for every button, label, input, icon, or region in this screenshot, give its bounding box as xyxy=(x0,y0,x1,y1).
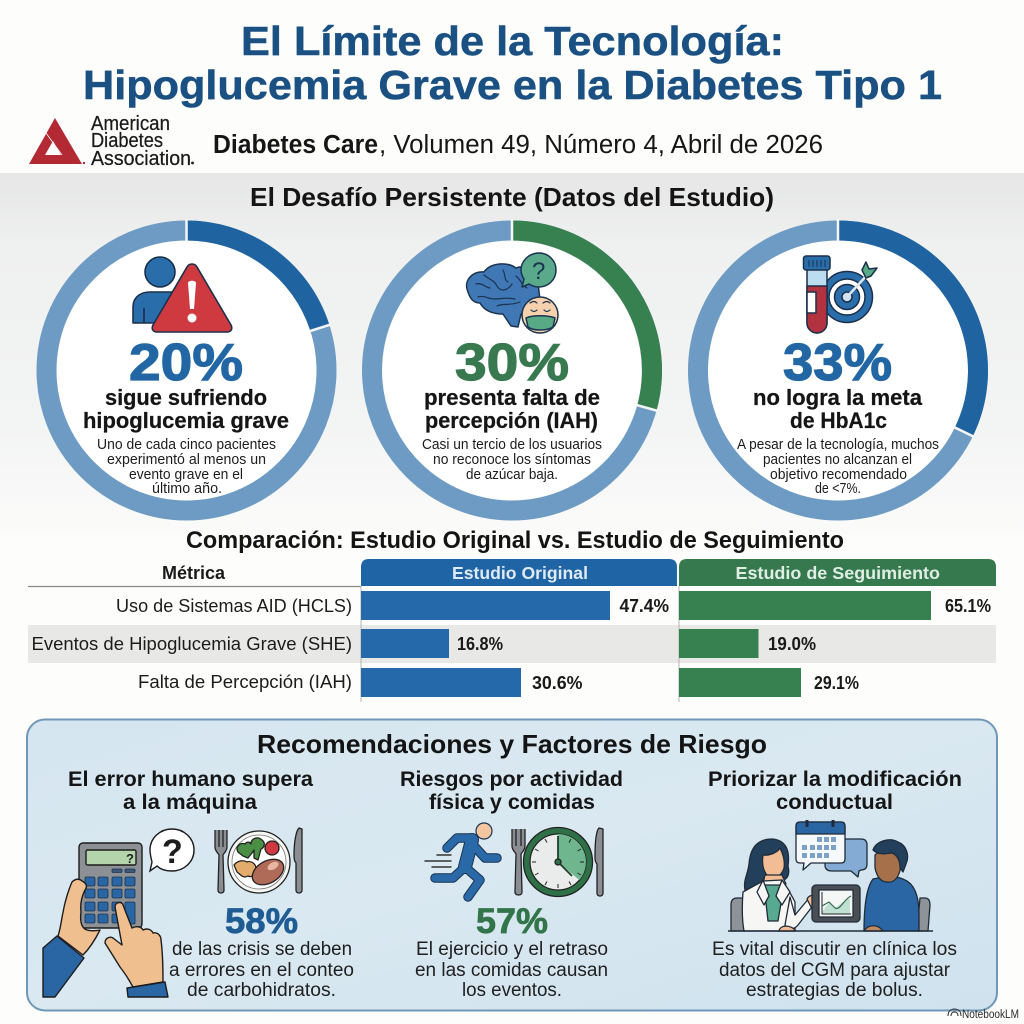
title: Hipoglucemia Grave en la Diabetes Tipo 1 xyxy=(83,62,942,108)
description: evento grave en el xyxy=(129,466,243,483)
description: de <7%. xyxy=(815,480,861,497)
description: de azúcar baja. xyxy=(466,466,558,483)
column: activity and meals xyxy=(400,767,623,1001)
row: Eventos de Hipoglucemia Grave xyxy=(32,629,816,658)
column heading xyxy=(68,767,314,814)
subtitle: presenta falta de xyxy=(424,385,600,410)
description xyxy=(169,939,354,1001)
logo: American Diabetes Association xyxy=(29,113,194,170)
description: datos del CGM para ajustar xyxy=(719,960,951,981)
subtitle: sigue sufriendo xyxy=(105,385,267,410)
description: los eventos. xyxy=(462,980,562,1001)
title: El Límite de la Tecnología: xyxy=(241,18,784,64)
description: experimentó al menos un xyxy=(107,451,266,468)
ring: 33 percent xyxy=(698,219,978,510)
stat: 58%: 58% xyxy=(225,902,298,941)
row: Uso de Sistemas AID: 65.1% xyxy=(945,596,991,616)
logo: American Diabetes Association: Diabetes xyxy=(91,130,163,152)
description xyxy=(737,436,939,497)
description: A pesar de la tecnología, muchos xyxy=(737,436,939,453)
description xyxy=(422,436,602,483)
description: objetivo recomendado xyxy=(770,466,907,483)
comparison table xyxy=(28,559,996,702)
stat: 20%: 20% xyxy=(129,334,243,392)
title xyxy=(83,18,942,108)
description xyxy=(97,436,276,497)
journal citation: Diabetes Care xyxy=(213,131,378,159)
panel: donut 20% xyxy=(46,219,331,510)
column heading: El error humano supera xyxy=(68,767,314,791)
description: de carbohidratos. xyxy=(187,980,336,1001)
description: Es vital discutir en clínica los xyxy=(712,939,957,960)
journal citation: , Volumen 49, Número 4, Abril de 2026 xyxy=(379,131,823,159)
stat: 57%: 57% xyxy=(476,902,548,941)
subtitle: hipoglucemia grave xyxy=(83,408,289,433)
column: behaviour change xyxy=(708,767,962,1001)
heading: comparison: Comparación: Estudio Original vs. Estudio de Seguimiento xyxy=(186,527,844,554)
heading: recommendations: Recomendaciones y Factores de Riesgo xyxy=(257,729,767,759)
subtitle xyxy=(753,385,923,433)
row: Uso de Sistemas AID: Uso de Sistemas AID (HCLS) xyxy=(116,595,352,616)
description: de las crisis se deben xyxy=(172,939,352,960)
icon: blood tube and target xyxy=(804,256,877,333)
row: Eventos de Hipoglucemia Grave: Eventos de Hipoglucemia Grave (SHE) xyxy=(32,633,352,654)
subtitle: de HbA1c xyxy=(790,408,887,433)
panel: donut 30% xyxy=(372,219,658,510)
logo: American Diabetes Association: Association xyxy=(91,148,191,170)
description xyxy=(415,939,608,1001)
row: Uso de Sistemas AID: 47.4% xyxy=(620,596,669,616)
column heading: física y comidas xyxy=(429,790,595,814)
column heading: conductual xyxy=(776,790,893,814)
row: Eventos de Hipoglucemia Grave: 19.0% xyxy=(768,634,816,654)
stat: 30%: 30% xyxy=(455,334,569,392)
header: Estudio Original: Estudio Original xyxy=(452,563,588,583)
description xyxy=(712,939,957,1001)
row: Falta de Percepción: Falta de Percepción (IAH) xyxy=(138,671,352,692)
subtitle: percepción (IAH) xyxy=(425,408,598,433)
column heading: Priorizar la modificación xyxy=(708,767,962,791)
row: Falta de Percepción xyxy=(138,668,859,697)
icon: brain with question and masked face xyxy=(467,253,558,333)
column: human error xyxy=(43,767,354,1001)
row: Falta de Percepción: 30.6% xyxy=(532,673,582,693)
row: Eventos de Hipoglucemia Grave: 16.8% xyxy=(457,634,503,654)
icon: calculator and hands xyxy=(43,843,168,997)
subtitle xyxy=(424,385,600,433)
header: Estudio de Seguimiento: Estudio de Seguimiento xyxy=(736,563,940,583)
column heading: Riesgos por actividad xyxy=(400,767,623,791)
description: pacientes no alcanzan el xyxy=(763,451,912,468)
icon: question bubble xyxy=(150,829,194,871)
column label: Métrica: Métrica xyxy=(162,562,226,583)
header: Estudio de Seguimiento xyxy=(679,559,996,586)
row: Uso de Sistemas AID xyxy=(116,591,991,620)
icon: calculator and hands: ? xyxy=(126,851,134,866)
icon: person with warning xyxy=(133,257,232,332)
icon: brain with question and masked face: ? xyxy=(532,258,545,285)
column heading xyxy=(400,767,623,814)
description: Uno de cada cinco pacientes xyxy=(97,436,276,453)
icon: plate with food xyxy=(215,828,302,893)
stat: 33%: 33% xyxy=(783,334,892,392)
column heading: a la máquina xyxy=(123,790,258,814)
logo: American Diabetes Association: American xyxy=(91,113,170,135)
row: Falta de Percepción: 29.1% xyxy=(814,673,859,693)
panel: recommendations xyxy=(27,720,997,1010)
icon: question bubble: ? xyxy=(162,833,183,871)
ring: 20 percent xyxy=(46,219,331,510)
description: último año. xyxy=(152,480,222,497)
panel: donut 33% xyxy=(698,219,978,510)
header: Estudio Original xyxy=(361,559,677,586)
subtitle: no logra la meta xyxy=(753,385,923,410)
description: estrategias de bolus. xyxy=(746,980,923,1001)
subtitle xyxy=(83,385,289,433)
description: Casi un tercio de los usuarios xyxy=(422,436,602,453)
illustration: clinic consultation xyxy=(728,820,933,931)
icon: clock plate xyxy=(512,828,603,896)
heading: El Desafío Persistente: El Desafío Persistente (Datos del Estudio) xyxy=(250,182,774,212)
description: no reconoce los síntomas xyxy=(433,451,591,468)
description: en las comidas causan xyxy=(415,960,608,981)
column heading xyxy=(708,767,962,814)
description: a errores en el conteo xyxy=(169,960,354,981)
icon: runner xyxy=(425,823,497,897)
ring: 30 percent xyxy=(372,219,658,510)
description: El ejercicio y el retraso xyxy=(416,939,608,960)
